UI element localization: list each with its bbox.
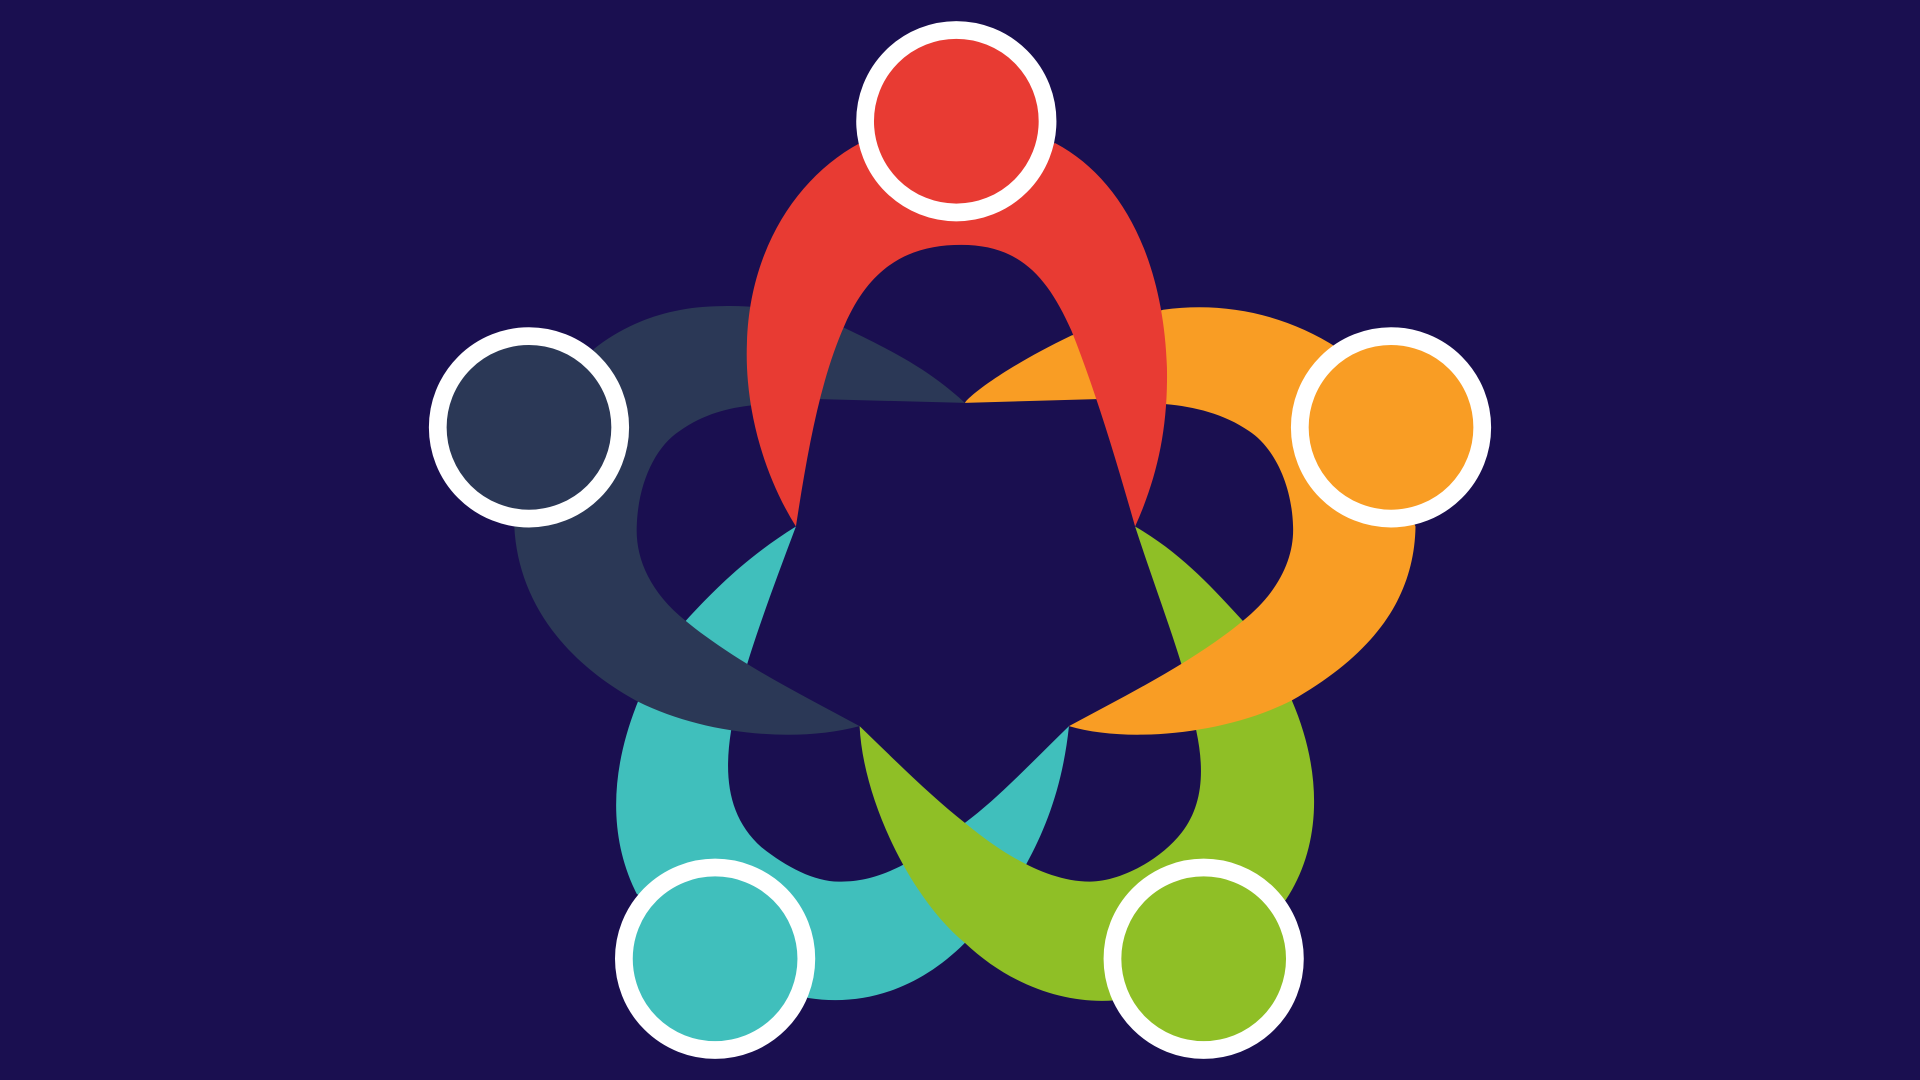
figure: navy person: [438, 306, 965, 735]
figure: orange person: [965, 307, 1482, 735]
figure: teal person: [616, 527, 1069, 1050]
figure: red person: [747, 30, 1167, 527]
figure: green person: [860, 527, 1314, 1050]
